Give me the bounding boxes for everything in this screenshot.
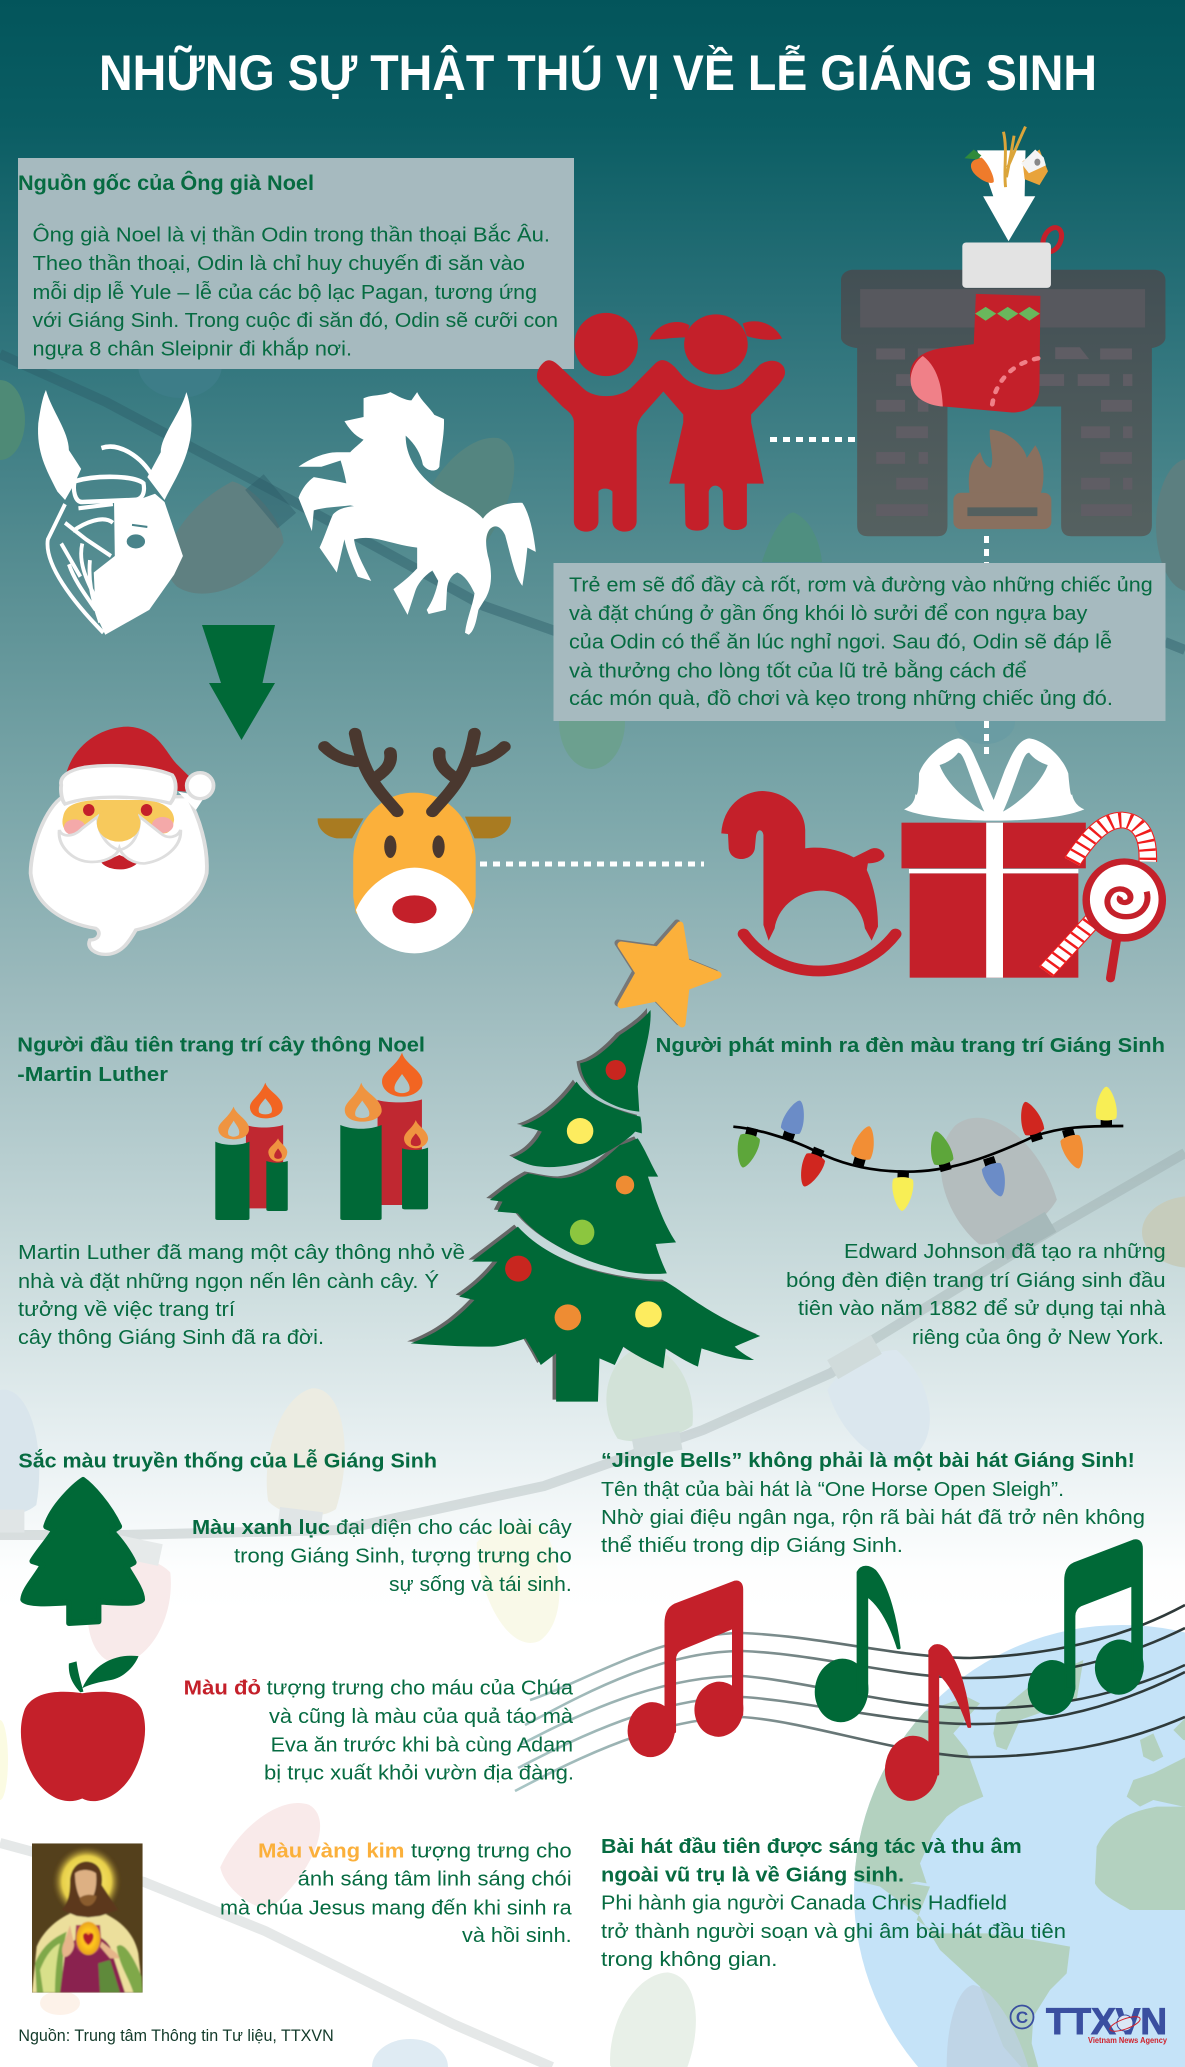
- text: red meaning: và cũng là màu của quả táo mà: [269, 1705, 574, 1728]
- heading: first to decorate tree: -Martin Luther: [17, 1063, 168, 1086]
- text: Edward Johnson story: tiên vào năm 1882 để sử dụng tại nhà: [798, 1297, 1166, 1320]
- panel: origin of Santa: Ông già Noel là vị thần Odin trong thần thoại Bắc Âu.: [32, 224, 550, 246]
- panel: children and stockings: [554, 563, 1166, 721]
- text: Jingle Bells: Nhờ giai điệu ngân nga, rộn rã bài hát đã trở nên không: [601, 1506, 1145, 1529]
- panel: origin of Santa: Theo thần thoại, Odin là chỉ huy chuyến đi săn vào: [32, 252, 525, 275]
- text: Edward Johnson story: [786, 1240, 1166, 1349]
- text: Edward Johnson story: Edward Johnson đã tạo ra những: [844, 1240, 1166, 1263]
- panel: children and stockings: và đặt chúng ở gần ống khói lò sưởi để con ngựa bay: [569, 602, 1088, 625]
- text: first song recorded in space: [601, 1835, 1066, 1971]
- text: first song recorded in space: trong không gian.: [601, 1948, 778, 1971]
- text: red meaning: [184, 1676, 574, 1784]
- text: green meaning: sự sống và tái sinh.: [389, 1573, 572, 1596]
- source note: Nguồn: Trung tâm Thông tin Tư liệu, TTXVN: [18, 2026, 334, 2045]
- globe: [840, 1625, 1185, 2067]
- music staff lines: [515, 1605, 1185, 1791]
- panel: origin of Santa: ngựa 8 chân Sleipnir đi khắp nơi.: [32, 338, 352, 361]
- text: first song recorded in space: Bài hát đầu tiên được sáng tác và thu âm: [601, 1835, 1022, 1858]
- icon: boy and girl: [537, 313, 785, 532]
- text: Edward Johnson story: bóng đèn điện trang trí Giáng sinh đầu: [786, 1269, 1166, 1292]
- dashed connectors: [480, 440, 986, 864]
- heading: traditional colours: Sắc màu truyền thống của Lễ Giáng Sinh: [18, 1448, 437, 1472]
- text: Edward Johnson story: riêng của ông ở New York.: [912, 1326, 1164, 1349]
- text: green meaning: Màu xanh lục: [192, 1516, 330, 1539]
- logo: TTXVN copyright: Vietnam News Agency: [1088, 2035, 1167, 2045]
- icon: gift with candy: [901, 738, 1166, 978]
- panel: origin of Santa: Nguồn gốc của Ông già Noel: [18, 171, 314, 195]
- panel: origin of Santa: mỗi dịp lễ Yule – lễ của các bộ lạc Pagan, tương ứng: [32, 281, 537, 304]
- icon: music notes: [622, 1540, 1149, 1806]
- icon: fireplace with stocking: [841, 225, 1165, 536]
- text: gold meaning: tượng trưng cho: [411, 1840, 572, 1862]
- text: first song recorded in space: trở thành người soạn và ghi âm bài hát đầu tiên: [601, 1920, 1066, 1943]
- icon: horse Sleipnir: [299, 392, 536, 635]
- text: Jingle Bells: “Jingle Bells” không phải là một bài hát Giáng Sinh!: [601, 1449, 1135, 1472]
- icon: string of lights: [732, 1087, 1123, 1211]
- text: green meaning: [192, 1516, 572, 1596]
- panel: children and stockings: và thưởng cho lòng tốt của lũ trẻ bằng cách để: [569, 659, 1027, 682]
- text: gold meaning: Màu vàng kim: [258, 1840, 404, 1862]
- icon: Christmas tree with star: [407, 923, 760, 1402]
- text: Martin Luther story: Martin Luther đã mang một cây thông nhỏ về: [18, 1241, 465, 1264]
- text: red meaning: Eva ăn trước khi bà cùng Adam: [271, 1733, 573, 1756]
- icon: candles: [215, 1053, 428, 1220]
- text: gold meaning: [220, 1840, 572, 1947]
- panel: children and stockings: các món quà, đồ chơi và kẹo trong những chiếc ủng đó.: [569, 687, 1113, 710]
- text: first song recorded in space: ngoài vũ trụ là về Giáng sinh.: [601, 1864, 904, 1886]
- text: green meaning: đại diện cho các loài cây: [336, 1516, 572, 1539]
- text: Jingle Bells: thể thiếu trong dịp Giáng Sinh.: [601, 1534, 903, 1557]
- text: gold meaning: mà chúa Jesus mang đến khi sinh ra: [220, 1896, 572, 1919]
- icon: reindeer: [318, 733, 511, 953]
- title: NHỮNG SỰ THẬT THÚ VỊ VỀ LỄ GIÁNG SINH: [99, 44, 1097, 101]
- heading: inventor of coloured lights: Người phát minh ra đèn màu trang trí Giáng Sinh: [656, 1034, 1165, 1057]
- picture: Sacred Heart of Jesus: [32, 1843, 143, 1993]
- panel: origin of Santa: với Giáng Sinh. Trong cuộc đi săn đó, Odin sẽ cưỡi con: [32, 309, 558, 332]
- arrow: green down: [202, 625, 275, 740]
- icon: green tree: [23, 1480, 142, 1623]
- icon: rocking horse: [721, 791, 896, 971]
- text: green meaning: trong Giáng Sinh, tượng trưng cho: [234, 1544, 572, 1567]
- heading: first to decorate tree: Người đầu tiên trang trí cây thông Noel: [17, 1034, 425, 1057]
- text: gold meaning: và hồi sinh.: [462, 1924, 572, 1947]
- heading: first to decorate tree: [17, 1034, 425, 1086]
- text: Martin Luther story: tưởng về việc trang trí: [18, 1298, 235, 1321]
- text: Jingle Bells: Tên thật của bài hát là “One Horse Open Sleigh”.: [601, 1478, 1064, 1501]
- logo: TTXVN copyright: C: [1016, 2008, 1028, 2027]
- panel: children and stockings: của Odin có thể ăn lúc nghỉ ngơi. Sau đó, Odin sẽ đáp lễ: [569, 630, 1112, 654]
- text: gold meaning: ánh sáng tâm linh sáng chói: [298, 1868, 572, 1890]
- panel: children and stockings: Trẻ em sẽ đổ đầy cà rốt, rơm và đường vào những chiếc ủng: [569, 574, 1153, 597]
- text: Martin Luther story: cây thông Giáng Sinh đã ra đời.: [18, 1326, 324, 1349]
- icon: Santa Claus: [31, 727, 214, 954]
- text: first song recorded in space: Phi hành gia người Canada Chris Hadfield: [601, 1892, 1007, 1915]
- panel: origin of Santa: [18, 158, 574, 369]
- text: Martin Luther story: [18, 1241, 465, 1349]
- text: red meaning: Màu đỏ: [184, 1676, 261, 1699]
- text: red meaning: tượng trưng cho máu của Chúa: [267, 1676, 574, 1699]
- icon: Odin head: [38, 390, 191, 635]
- text: Martin Luther story: nhà và đặt những ngọn nến lên cành cây. Ý: [18, 1270, 439, 1293]
- icon: white arrow with carrot, straw and sugar: [964, 127, 1048, 241]
- text: red meaning: bị trục xuất khỏi vườn địa đàng.: [264, 1762, 574, 1784]
- text: Jingle Bells: [601, 1449, 1145, 1557]
- icon: red apple: [21, 1656, 145, 1801]
- logo: TTXVN copyright: TTXVN: [1046, 2001, 1167, 2042]
